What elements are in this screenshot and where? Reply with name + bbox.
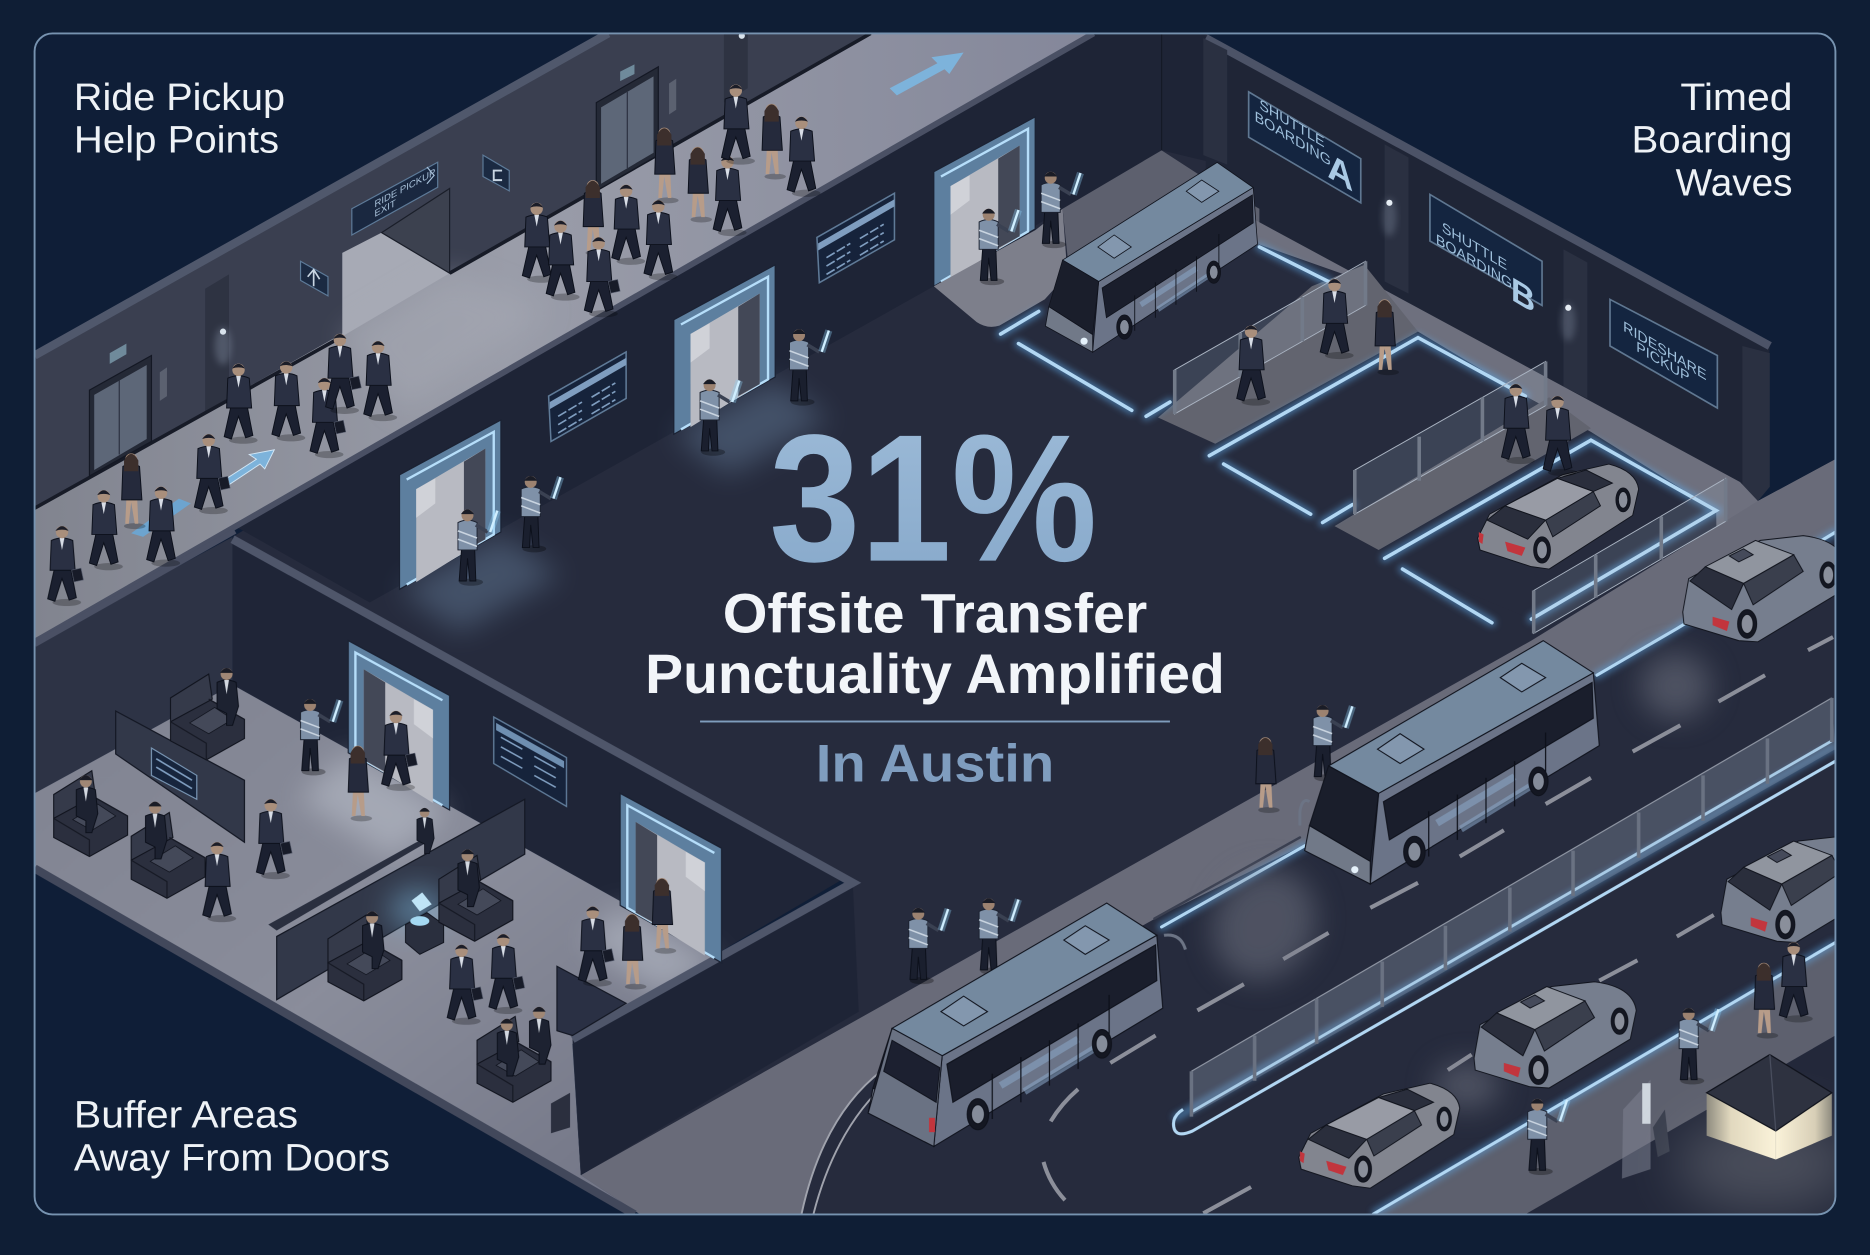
long kerbside sidewalk <box>581 459 1835 1214</box>
fence between bays A and B <box>1175 261 1366 414</box>
SUV lower lane <box>1474 982 1636 1088</box>
upper corridor wall <box>35 33 871 508</box>
room right wall <box>233 539 859 1175</box>
sign: shuttle boarding B: SHUTTLE <box>1442 219 1507 274</box>
road lane dashes <box>1044 637 1833 1213</box>
people on platforms <box>1237 279 1577 476</box>
room: left wall <box>35 537 233 793</box>
back wall of bays <box>1203 38 1770 501</box>
platform by door three <box>934 150 1259 327</box>
headline title: Offsite Transfer <box>723 581 1147 644</box>
label: timed boarding waves: Timed <box>1680 76 1792 119</box>
room door B <box>620 793 722 963</box>
sign: rideshare pickup: PICKUP <box>1636 339 1689 386</box>
small partition by door <box>557 966 626 1035</box>
corridor front curb and dark wall <box>35 33 1206 642</box>
SUV top right <box>1683 536 1845 642</box>
label: buffer areas away from doors: Away From Doors <box>74 1136 390 1179</box>
floor arrow upper <box>890 52 964 95</box>
headline title <box>645 581 1225 705</box>
bay two asphalt <box>1527 397 1538 404</box>
glowing table lamp <box>389 888 446 954</box>
headline divider <box>700 721 1170 722</box>
door stewards <box>458 172 1080 586</box>
sign: rideshare pickup: RIDESHARE <box>1623 318 1707 384</box>
sign: corridor marker <box>483 155 509 191</box>
shuttle bus lower <box>868 903 1185 1146</box>
central low partition <box>268 799 525 1000</box>
label: ride pickup help points: Help Points <box>74 119 279 162</box>
corridor travellers upper group <box>522 84 821 317</box>
headline title: Punctuality Amplified <box>645 642 1225 705</box>
sign: rideshare pickup <box>1610 299 1717 408</box>
corridor skirting <box>35 33 871 508</box>
lower right dark plot <box>1525 1035 1835 1214</box>
elevator left <box>89 344 167 476</box>
lit corridor opening <box>339 188 460 384</box>
sofas and seated travellers <box>54 668 244 898</box>
median barrier with fence <box>1174 698 1835 1134</box>
sign: shuttle boarding A: BOARDING <box>1255 109 1331 170</box>
corridor floor <box>35 33 1091 639</box>
room guide <box>301 699 340 775</box>
parked sedan in bay <box>1478 464 1639 569</box>
room: back wall <box>233 539 841 954</box>
sign: shuttle boarding A: A <box>1327 145 1353 200</box>
sky below room <box>35 873 626 1214</box>
label: buffer areas away from doors <box>74 1093 390 1179</box>
room door A <box>348 641 450 810</box>
label: ride pickup help points <box>74 76 285 162</box>
sign: shuttle boarding A: SHUTTLE <box>1259 97 1325 151</box>
lower right people <box>1528 942 1813 1175</box>
headline statistic: 31% <box>769 398 1097 600</box>
glowing bay markings <box>1001 247 1716 623</box>
room departures board <box>494 717 566 806</box>
label: ride pickup help points: Ride Pickup <box>74 76 285 119</box>
pickup bay three asphalt <box>1385 440 1716 619</box>
exhaust smoke <box>1192 653 1711 1109</box>
kerb curve lines <box>800 1073 878 1214</box>
island two <box>1158 265 1418 444</box>
low corridor curb at left <box>35 531 235 644</box>
sign: shuttle boarding B <box>1430 194 1542 321</box>
shuttle bus at bay A <box>1045 162 1258 352</box>
bus centre headlight and mirror <box>1300 800 1358 873</box>
room outer curb <box>35 868 634 1214</box>
door one <box>400 420 501 589</box>
shuttle bus centre <box>1305 641 1599 884</box>
sign: shuttle boarding B: B <box>1511 269 1535 321</box>
sedan lower lane <box>1299 1083 1460 1188</box>
room door glow <box>298 753 722 996</box>
door three <box>934 117 1035 286</box>
floor strip marker <box>131 499 191 537</box>
kiosk with warm light <box>1676 1055 1854 1211</box>
sign: ride pickup exit: RIDE PICKUP <box>374 167 436 210</box>
room: floor <box>35 685 716 1214</box>
kerbside blue lines <box>1154 532 1835 927</box>
corridor travellers lower group <box>48 334 397 606</box>
kerb stewards <box>909 705 1352 984</box>
elevator upper <box>596 64 676 191</box>
info totem <box>1622 1080 1670 1179</box>
sign: shuttle boarding B: BOARDING <box>1436 231 1512 293</box>
fence between bays B and C <box>1355 361 1546 514</box>
label: buffer areas away from doors: Buffer Areas <box>74 1093 298 1136</box>
sign: ride pickup exit <box>352 162 438 235</box>
departures board one <box>549 352 626 441</box>
SUV right edge <box>1721 836 1870 942</box>
room travellers <box>203 711 676 1025</box>
door two <box>674 265 775 434</box>
door glow <box>400 379 829 632</box>
label: timed boarding waves <box>1631 76 1792 205</box>
label: timed boarding waves: Waves <box>1676 162 1792 205</box>
sign: shuttle boarding A <box>1249 92 1361 203</box>
bus bay A headlight <box>1080 338 1088 345</box>
sign: ride pickup exit: EXIT <box>374 198 396 220</box>
departures board two <box>817 193 894 283</box>
fence along kerb <box>1534 478 1726 633</box>
location subtitle: In Austin <box>816 734 1054 793</box>
lounge seats right <box>328 849 570 1133</box>
room partition with screen <box>116 711 244 842</box>
label: timed boarding waves: Boarding <box>1631 119 1792 162</box>
sidewalk along back wall <box>1256 220 1834 538</box>
floor arrow lower <box>223 450 274 486</box>
lower right sidewalk <box>1373 942 1835 1214</box>
island three <box>1335 397 1591 550</box>
sign: up arrow <box>301 261 328 296</box>
